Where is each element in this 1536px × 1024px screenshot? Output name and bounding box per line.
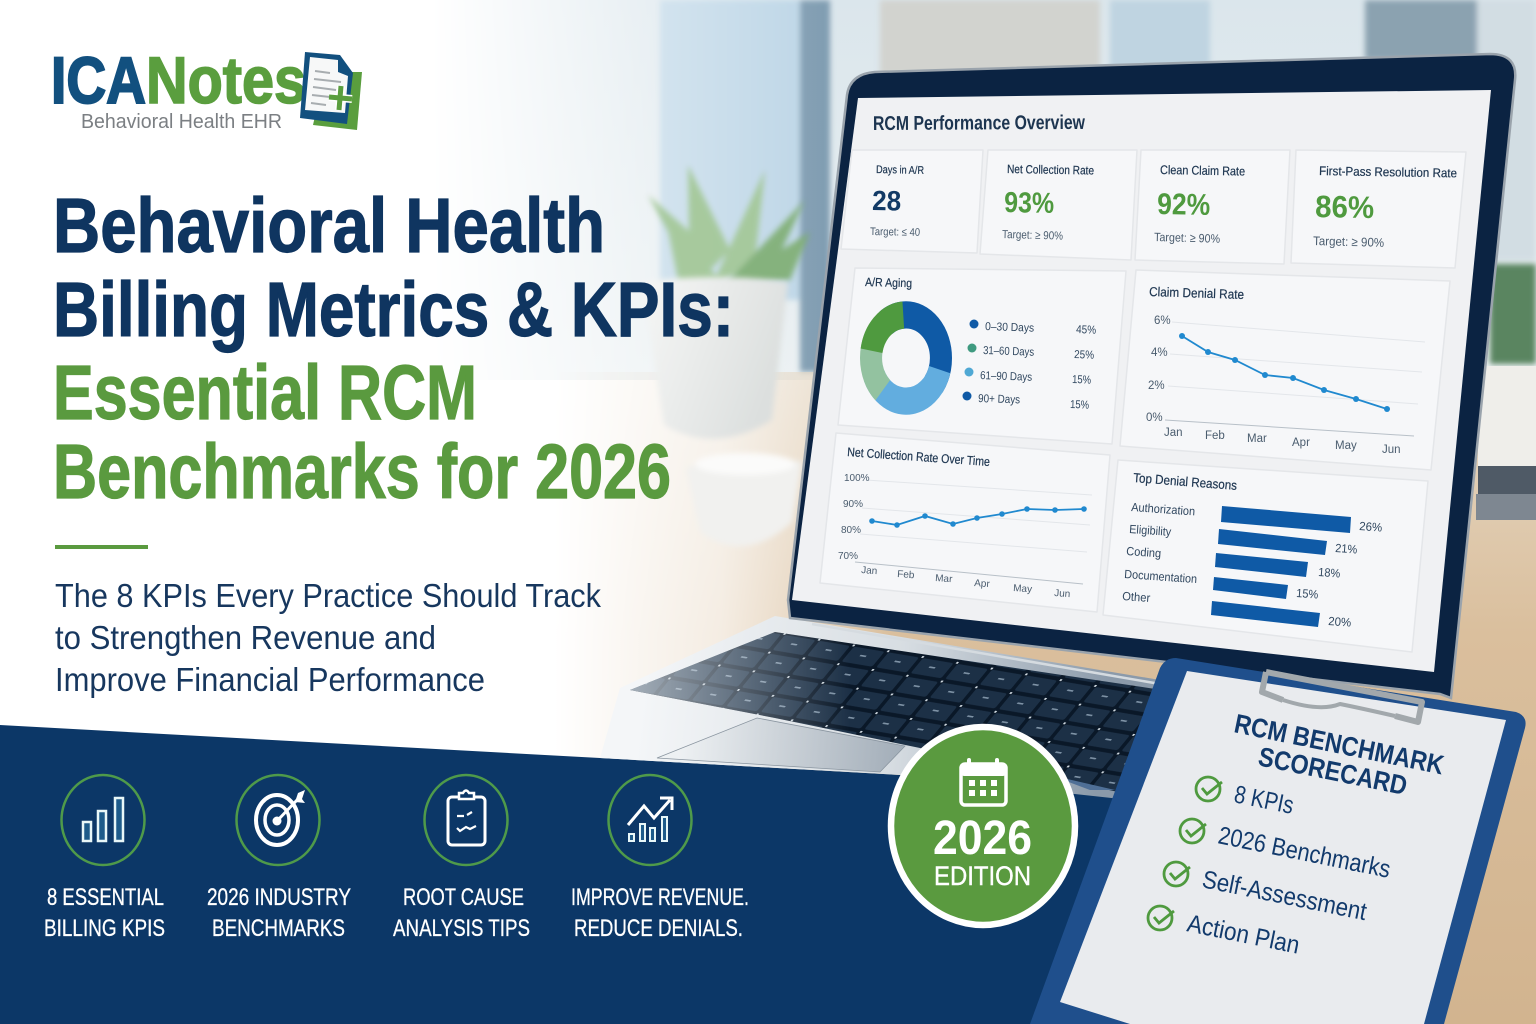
KPI card: Clean Claim Rate: Clean Claim Rate [1160,163,1245,178]
donut legend: 25% [1074,349,1094,362]
scorecard heading: SCORECARD [1256,741,1410,801]
panel: A/R Aging: A/R Aging [865,275,912,290]
dashboard heading: RCM Performance Overview [873,112,1085,135]
plant and pot [642,165,810,439]
panel: Net Collection Rate Over Time [820,433,1110,612]
laptop base and keyboard [600,616,1162,800]
subtitle: to Strengthen Revenue and [55,619,436,656]
bar chart: denial reasons: Documentation [1124,567,1198,586]
bar chart: denial reasons: Eligibility [1129,522,1172,539]
line chart: denial rate: 2% [1148,380,1165,392]
coffee cup [686,453,802,546]
bar chart: denial reasons: 26% [1359,519,1383,535]
badge: 2026 edition [891,727,1075,925]
title: Billing Metrics & KPIs: [53,267,734,353]
line chart: net collection rate: Feb [897,569,915,581]
panel: Claim Denial Rate: Claim Denial Rate [1149,284,1244,302]
donut chart [857,297,955,419]
icon: target [236,775,320,865]
KPI card: First-Pass Resolution Rate [1291,150,1466,268]
line chart: net collection rate: 100% [844,473,870,484]
title: Behavioral Health [53,183,605,269]
line chart: denial rate: Apr [1292,437,1310,449]
feature: improve revenue, reduce denials: REDUCE DENIALS. [574,915,743,942]
KPI card: Net Collection Rate: Net Collection Rate [1007,162,1094,178]
icon: calendar [961,758,1006,805]
checklist [1148,777,1393,960]
line chart: denial rate: 6% [1154,315,1171,327]
line chart: net collection rate: May [1013,583,1032,595]
feature: root cause analysis tips [393,775,530,942]
line chart: denial rate: May [1335,440,1357,452]
clipboard: RCM benchmark scorecard [1030,658,1526,1024]
donut legend: 15% [1070,399,1089,412]
title: Essential RCM [53,350,477,436]
KPI card: Days in A/R: Days in A/R [876,164,924,177]
checklist: Self-Assessment [1200,865,1369,926]
line chart: denial rate: Jan [1164,427,1183,439]
scorecard heading: RCM BENCHMARK [1232,708,1447,780]
donut legend: 45% [1076,324,1096,337]
donut legend: 0–30 Days [985,321,1035,335]
line chart: net collection rate [838,473,1092,600]
logo: ICA [51,43,146,117]
line chart: denial rate: Mar [1247,433,1267,445]
clipboard board [1030,658,1526,1024]
donut legend: 61–90 Days [980,370,1032,384]
KPI card: Days in A/R: Target: ≤ 40 [870,226,920,239]
subtitle: The 8 KPIs Every Practice Should Track [55,577,601,614]
KPI card: Clean Claim Rate: 92% [1157,188,1210,222]
feature: root cause analysis tips: ANALYSIS TIPS [393,915,530,942]
icon: growth chart [608,775,692,865]
donut legend: 31–60 Days [983,345,1034,359]
panel: Claim Denial Rate [1120,270,1450,470]
feature: root cause analysis tips: ROOT CAUSE [403,884,524,911]
line chart: denial rate [1146,315,1425,456]
line chart: denial rate: 0% [1146,412,1163,424]
line chart: denial rate: Jun [1382,444,1401,456]
logo: Notes [146,43,306,117]
checklist: 8 KPIs [1232,780,1296,820]
KPI card: Net Collection Rate: 93% [1004,187,1055,220]
line chart: net collection rate: Mar [935,573,953,585]
title: Benchmarks for 2026 [53,429,671,515]
checklist: 2026 Benchmarks [1216,821,1393,884]
metal clip [1262,672,1422,722]
bar chart: denial reasons: Other [1122,589,1151,605]
KPI card: Days in A/R [841,150,983,253]
icon: clipboard [424,775,508,865]
KPI card: First-Pass Resolution Rate: Target: ≥ 90% [1313,234,1384,250]
navy bottom band [0,725,1200,1024]
KPI card: Net Collection Rate [980,150,1137,260]
line chart: denial rate: Feb [1205,430,1225,442]
subtitle: Improve Financial Performance [55,661,485,698]
line chart: net collection rate: 90% [843,499,863,510]
KPI card: Clean Claim Rate [1135,150,1290,264]
KPI card: First-Pass Resolution Rate: First-Pass Resolution Rate [1319,164,1457,180]
KPI card: Clean Claim Rate: Target: ≥ 90% [1154,230,1221,246]
badge: 2026 edition: 2026 [933,812,1032,865]
logo [51,43,362,133]
panel: A/R Aging [838,268,1126,444]
feature: improve revenue, reduce denials [571,775,749,942]
laptop lid bezel [788,54,1515,698]
donut legend [962,320,1096,412]
panel: Top Denial Reasons: Top Denial Reasons [1133,470,1238,493]
feature: 8 essential billing KPIs: BILLING KPIS [44,915,165,942]
KPI card: Days in A/R: 28 [872,185,901,217]
bar chart: denial reasons [1122,500,1383,630]
background: blurred office and desk photo [512,0,1536,1024]
bar chart: denial reasons: 18% [1318,565,1341,581]
line chart: net collection rate: Apr [974,578,991,590]
KPI card: First-Pass Resolution Rate: 86% [1315,189,1374,225]
line chart: net collection rate: Jun [1054,588,1071,600]
bar chart: denial reasons: 21% [1335,541,1358,557]
bar chart: denial reasons: Coding [1126,544,1162,560]
feature: 2026 industry benchmarks [207,775,351,942]
laptop screen [792,90,1491,672]
feature: improve revenue, reduce denials: IMPROVE REVENUE. [571,884,749,911]
donut legend: 90+ Days [978,393,1021,406]
icon: bar chart [62,775,144,865]
feature: 8 essential billing KPIs [44,775,165,942]
feature: 2026 industry benchmarks: 2026 INDUSTRY [207,884,351,911]
line chart: net collection rate: Jan [861,565,878,577]
bar chart: denial reasons: Authorization [1131,500,1196,518]
panel: Net Collection Rate Over Time: Net Collection Rate Over Time [847,445,990,469]
badge: 2026 edition: EDITION [934,861,1031,891]
checklist: Action Plan [1185,909,1302,960]
bar chart: denial reasons: 20% [1328,614,1352,630]
KPI card: Net Collection Rate: Target: ≥ 90% [1002,229,1063,243]
icon: document plus [300,52,362,130]
line chart: net collection rate: 70% [838,551,858,562]
line chart: net collection rate: 80% [841,525,861,536]
feature: 8 essential billing KPIs: 8 ESSENTIAL [47,884,164,911]
panel: Top Denial Reasons [1103,460,1428,652]
logo: Behavioral Health EHR [81,111,282,133]
feature: 2026 industry benchmarks: BENCHMARKS [212,915,345,942]
title [53,183,734,515]
line chart: denial rate: 4% [1151,347,1168,359]
bar chart: denial reasons: 15% [1296,586,1319,602]
subtitle [55,577,601,698]
donut legend: 15% [1072,374,1091,387]
scorecard paper [1060,671,1506,1024]
